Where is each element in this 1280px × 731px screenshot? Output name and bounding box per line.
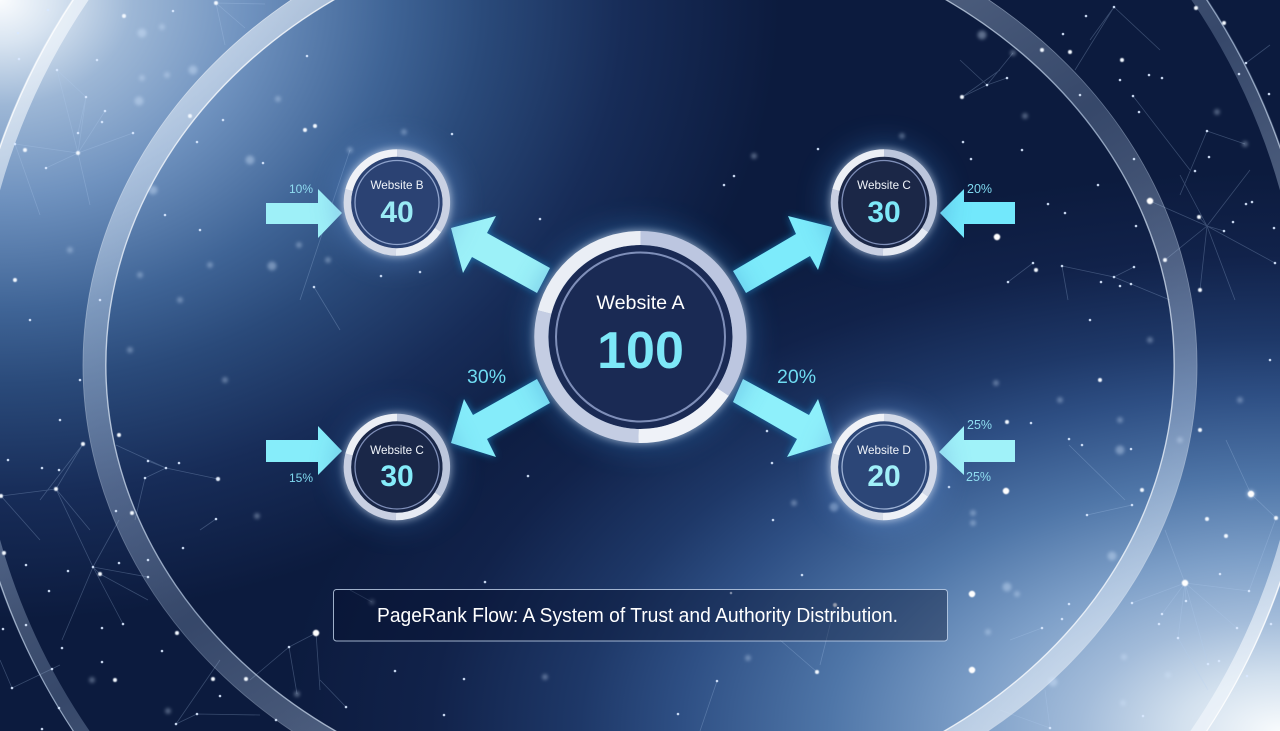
percent label: 25% lower: 25% (966, 470, 991, 484)
arrow: Website A to Website B (451, 216, 550, 293)
percent label: 25% upper: 25% (967, 418, 992, 432)
percent label: 20%: 20% (777, 366, 816, 388)
arrow: Website A to Website D (733, 379, 832, 457)
label: Website D: Website D (857, 444, 911, 457)
caption box (334, 590, 948, 641)
percent label: 10%: 10% (289, 182, 313, 196)
inbound arrow into Website B (266, 189, 342, 238)
label: Website C bottom: Website C (370, 444, 424, 457)
node: Website D (824, 407, 944, 527)
label: Website A: Website A (596, 292, 686, 314)
percent label: 20% top right: 20% (967, 182, 992, 196)
value: 40: 40 (380, 196, 414, 229)
percent label: 30%: 30% (467, 366, 506, 388)
inbound arrow into Website D (939, 426, 1015, 475)
node: Website C bottom (337, 407, 457, 527)
node: Website B (337, 142, 457, 262)
label: Website C top: Website C (857, 179, 911, 192)
inbound arrow into Website C top (940, 189, 1015, 238)
node: Website A (528, 225, 752, 449)
caption text: PageRank Flow: A System of Trust and Authority Distribution. (377, 605, 898, 627)
value: 30 bottom: 30 (380, 460, 414, 493)
value: 100: 100 (597, 322, 684, 380)
inbound arrow into Website C bottom (266, 426, 342, 475)
percent label: 15%: 15% (289, 471, 313, 485)
value: 20: 20 (867, 460, 901, 493)
value: 30 top: 30 (867, 196, 901, 229)
arrow: Website A to Website C top (733, 216, 832, 293)
node: Website C top (824, 142, 944, 262)
arrow: Website A to Website C bottom (451, 379, 550, 457)
label: Website B: Website B (370, 179, 424, 192)
